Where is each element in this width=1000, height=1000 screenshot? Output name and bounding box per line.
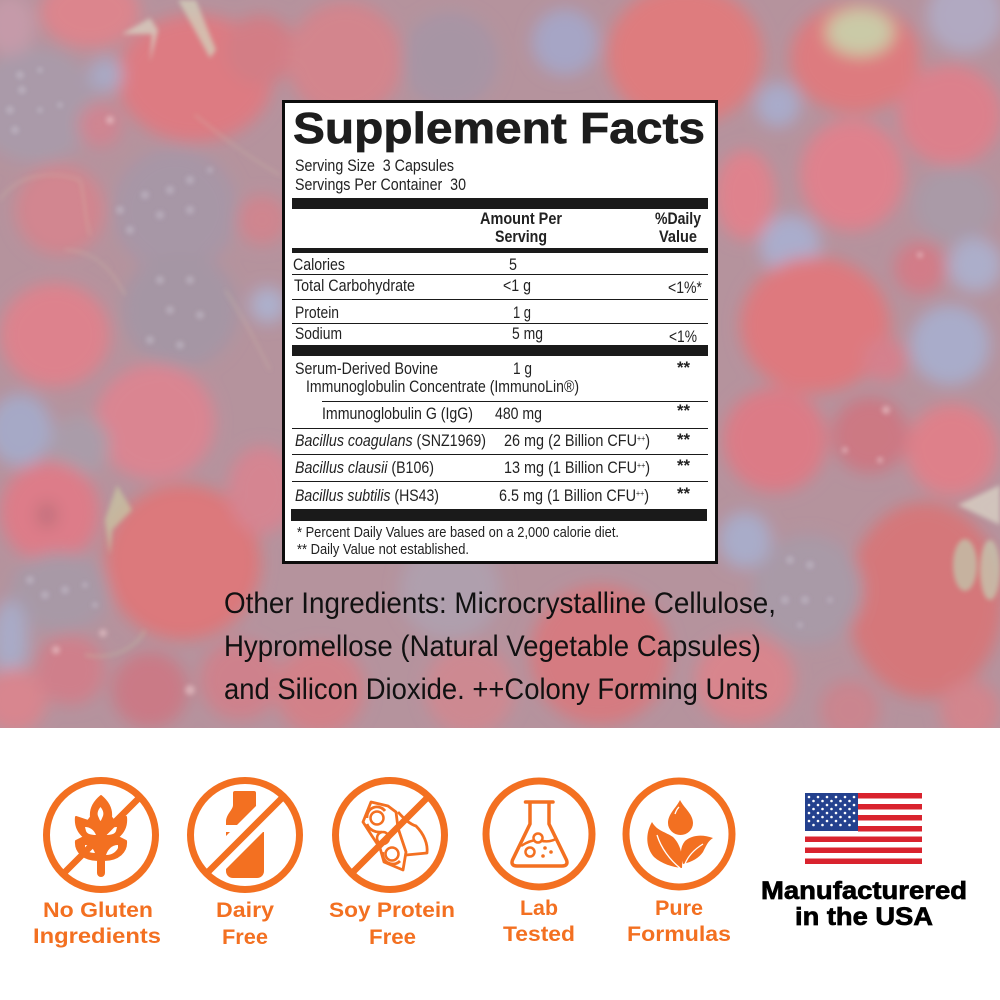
other ingredients text: Other Ingredients: Microcrystalline Cellulose,: [224, 587, 776, 620]
row: bacillus subtilis: Bacillus subtilis (HS43): [295, 487, 439, 505]
leaves: [105, 0, 1000, 600]
drupelets: [6, 67, 833, 628]
row: bacillus clausii: ): [645, 459, 650, 477]
stems: [199, 118, 212, 128]
row: bacillus clausii: [295, 457, 691, 477]
row: total carbohydrate: <1%*: [668, 279, 702, 297]
row: sodium: <1%: [669, 328, 697, 346]
row: bacillus subtilis: ): [644, 487, 649, 505]
label: lab tested: Lab: [520, 897, 558, 920]
label: lab tested: Tested: [503, 923, 575, 946]
label: soy protein free: [329, 899, 455, 949]
label: manufactured in the USA: [761, 877, 967, 931]
row: immunoglobulin concentrate: Serum-Derived Bovine: [295, 360, 438, 378]
highlights: [52, 116, 923, 695]
berry background photo: [0, 0, 1000, 740]
row: bacillus clausii: **: [677, 457, 691, 475]
column headers: Value: [659, 228, 697, 246]
label: soy protein free: Free: [369, 926, 416, 949]
other ingredients text: Hypromellose (Natural Vegetable Capsules): [224, 630, 761, 663]
other ingredients text: [224, 587, 776, 706]
icon: dairy free: [190, 780, 300, 890]
label: pure formulas: Formulas: [627, 923, 731, 946]
row: bacillus coagulans: ++: [637, 434, 645, 443]
label: pure formulas: [627, 897, 731, 946]
icon: lab flask: [486, 781, 592, 887]
row: calories: Calories: [293, 256, 345, 274]
label: dairy free: Dairy: [216, 899, 274, 922]
label: no gluten ingredients: Ingredients: [33, 925, 161, 948]
label: no gluten ingredients: [33, 899, 161, 948]
column headers: Serving: [495, 228, 547, 246]
row: immunoglobulin G: [322, 402, 691, 423]
row: immunoglobulin concentrate: **: [677, 359, 691, 377]
row: total carbohydrate: Total Carbohydrate: [294, 277, 415, 295]
label: manufactured in the USA: in the USA: [795, 903, 933, 931]
row: protein: [295, 304, 531, 322]
footnotes: [297, 524, 619, 558]
row: bacillus subtilis: 6.5 mg (1 Billion CFU: [499, 487, 656, 505]
table rules: [291, 198, 708, 521]
row: total carbohydrate: [294, 277, 702, 297]
label: no gluten ingredients: No Gluten: [43, 899, 153, 922]
row: immunoglobulin G: **: [677, 402, 691, 420]
label: dairy free: [216, 899, 274, 949]
row: sodium: 5 mg: [512, 325, 543, 343]
column headers: [480, 210, 702, 246]
icon: pure drop and leaves: [626, 781, 732, 887]
row: protein: 1 g: [513, 304, 531, 322]
footnotes: ** Daily Value not established.: [297, 541, 469, 558]
row: total carbohydrate: <1 g: [503, 277, 531, 295]
panel: white badge strip: [0, 728, 1000, 1000]
row: immunoglobulin concentrate: [295, 359, 691, 396]
row: protein: Protein: [295, 304, 339, 322]
row: calories: [293, 256, 517, 274]
row: bacillus subtilis: [295, 485, 691, 505]
row: bacillus subtilis: **: [677, 485, 691, 503]
label: lab tested: [503, 897, 575, 946]
row: calories: 5: [509, 256, 517, 274]
label: soy protein free: Soy Protein: [329, 899, 455, 922]
icon: soy protein free: [336, 780, 444, 890]
row: bacillus coagulans: [295, 431, 691, 450]
row: immunoglobulin concentrate: Immunoglobulin Concentrate (ImmunoLin®): [306, 378, 579, 396]
column headers: Amount Per: [480, 210, 562, 228]
row: bacillus clausii: 13 mg (1 Billion CFU: [504, 459, 656, 477]
row: sodium: [295, 325, 697, 346]
other ingredients text: and Silicon Dioxide. ++Colony Forming Units: [224, 673, 768, 706]
row: bacillus clausii: Bacillus clausii (B106): [295, 459, 434, 477]
row: bacillus coagulans: Bacillus coagulans (SNZ1969): [295, 432, 486, 450]
label: pure formulas: Pure: [655, 897, 703, 920]
panel: supplement facts table: [284, 102, 716, 562]
serving info: [295, 157, 466, 194]
label: dairy free: Free: [222, 926, 268, 949]
title: Supplement Facts: [293, 104, 705, 153]
row: bacillus subtilis: ++: [636, 489, 644, 498]
serving info: Servings Per Container 30: [295, 176, 466, 194]
row: immunoglobulin concentrate: 1 g: [513, 360, 532, 378]
footnotes: * Percent Daily Values are based on a 2,000 calorie diet.: [297, 524, 619, 541]
column headers: %Daily: [655, 210, 702, 228]
row: immunoglobulin G: Immunoglobulin G (IgG): [322, 405, 473, 423]
row: bacillus coagulans: ): [645, 432, 650, 450]
row: immunoglobulin G: 480 mg: [495, 405, 542, 423]
label: manufactured in the USA: Manufacturered: [761, 877, 967, 905]
icon: american flag: [805, 793, 922, 864]
serving info: Serving Size 3 Capsules: [295, 157, 454, 175]
row: bacillus coagulans: 26 mg (2 Billion CFU: [504, 432, 656, 450]
row: bacillus coagulans: **: [677, 431, 691, 449]
row: bacillus clausii: ++: [637, 461, 645, 470]
row: sodium: Sodium: [295, 325, 342, 343]
icon: no gluten: [46, 780, 156, 890]
